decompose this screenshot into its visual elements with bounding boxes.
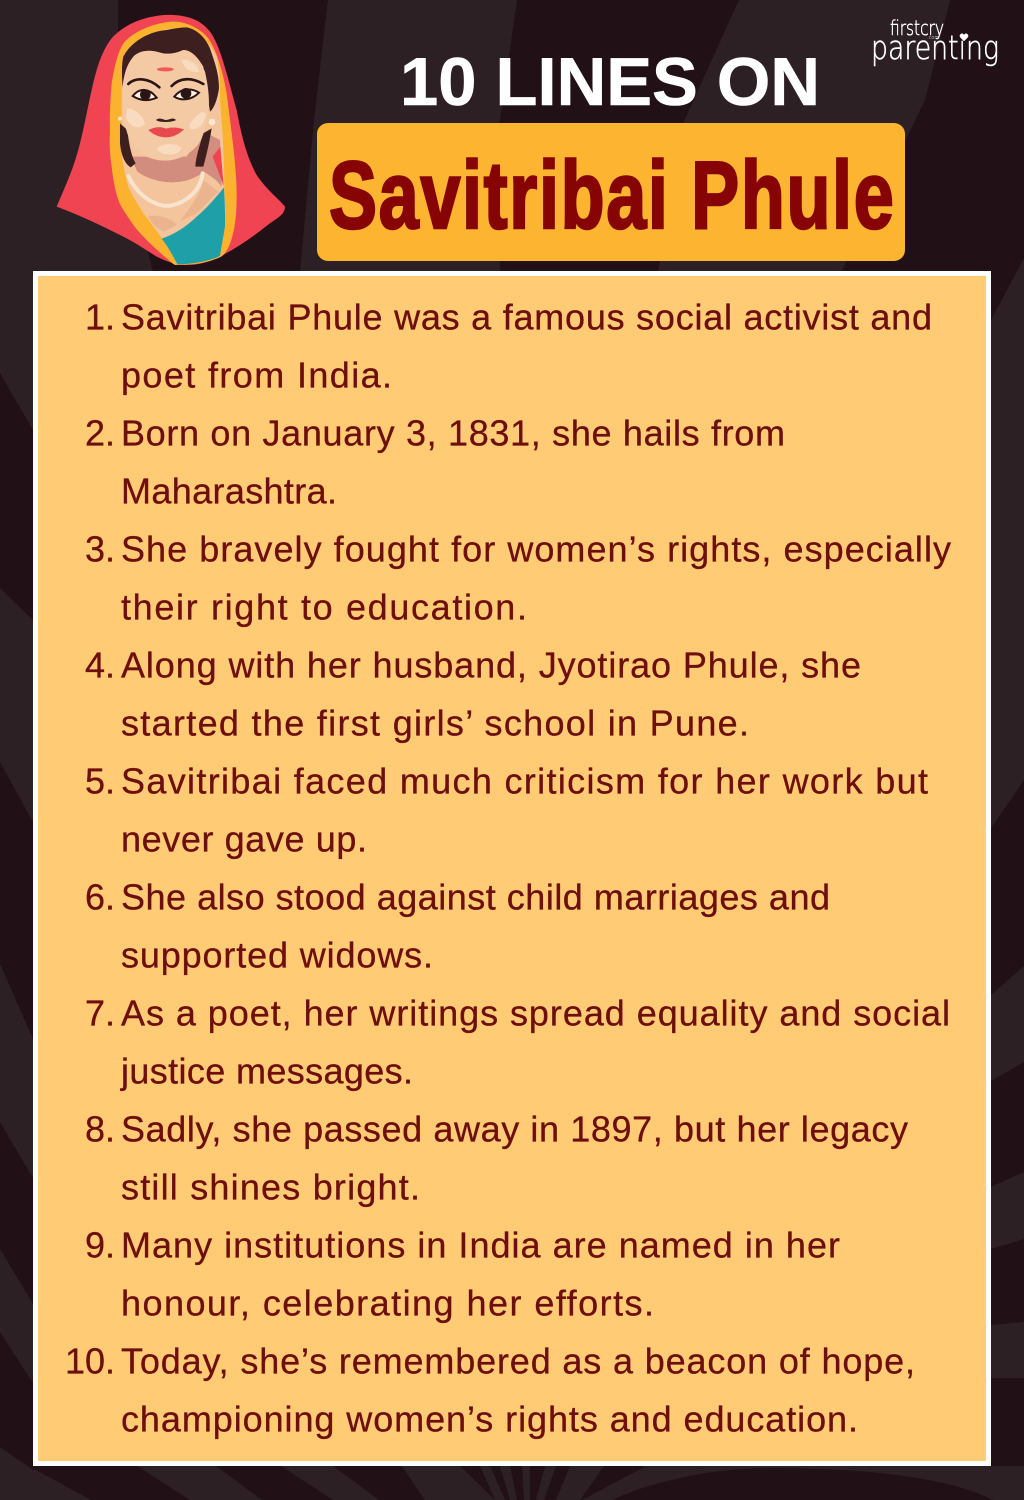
teal blouse — [162, 187, 225, 264]
logo domain: .com — [927, 35, 939, 41]
item 10: 10. — [65, 1340, 115, 1382]
item 9: 9. — [85, 1224, 115, 1266]
neck and chest — [122, 28, 225, 263]
eyebrows — [128, 79, 203, 87]
item 1: 1. — [85, 296, 115, 338]
item 1 — [85, 296, 932, 396]
item 3: their right to education. — [121, 586, 527, 628]
item 8: still shines bright. — [121, 1166, 420, 1208]
item 7: As a poet, her writings spread equality and social — [121, 992, 950, 1034]
logo: FirstCry Parenting — [871, 16, 999, 67]
item 5 — [85, 760, 928, 860]
bindi — [157, 67, 174, 71]
item 2 — [85, 412, 785, 512]
item 10: championing women’s rights and education. — [121, 1398, 858, 1440]
item 7: justice messages. — [120, 1050, 413, 1092]
name banner — [317, 123, 905, 261]
eyes — [133, 89, 199, 100]
item 1: poet from India. — [121, 354, 392, 396]
chest highlight — [148, 216, 177, 232]
pearl necklace — [128, 173, 203, 206]
item 4: Along with her husband, Jyotirao Phule, she — [121, 644, 861, 686]
chest shadow — [180, 180, 218, 222]
item 8 — [85, 1108, 908, 1208]
item 7 — [85, 992, 950, 1092]
lower hair right — [195, 128, 212, 167]
item 3: 3. — [85, 528, 115, 570]
illustration: Savitribai Phule portrait — [57, 15, 285, 265]
item 2: Born on January 3, 1831, she hails from — [121, 412, 785, 454]
neck shadow — [131, 132, 222, 187]
item 9: honour, celebrating her efforts. — [121, 1282, 654, 1324]
item 9 — [85, 1224, 840, 1324]
item 9: Many institutions in India are named in her — [121, 1224, 840, 1266]
item 7: 7. — [85, 992, 115, 1034]
item 10 — [65, 1340, 915, 1440]
item 8: Sadly, she passed away in 1897, but her legacy — [121, 1108, 908, 1150]
item 10: Today, she’s remembered as a beacon of hope, — [121, 1340, 915, 1382]
panel: ten lines list — [36, 274, 988, 1464]
hair — [122, 27, 219, 112]
item 6: She also stood against child marriages and — [121, 876, 830, 918]
item 5: Savitribai faced much criticism for her work but — [121, 760, 928, 802]
item 2: 2. — [85, 412, 115, 454]
logo word firstcry: firstcry — [890, 16, 944, 40]
face — [123, 50, 209, 161]
item 4: 4. — [85, 644, 115, 686]
nose — [156, 119, 176, 122]
face highlights — [126, 60, 206, 155]
lips — [148, 127, 184, 137]
item 6 — [85, 876, 830, 976]
item 2: Maharashtra. — [121, 470, 337, 512]
lower hair left — [120, 123, 136, 167]
item 3: She bravely fought for women’s rights, especially — [121, 528, 951, 570]
item 8: 8. — [85, 1108, 115, 1150]
logo heart — [960, 34, 968, 41]
item 1: Savitribai Phule was a famous social activist and — [121, 296, 932, 338]
title: 10 LINES ON: 10 LINES ON — [400, 44, 820, 120]
item 6: 6. — [85, 876, 115, 918]
ears with pearl earrings — [209, 119, 215, 125]
red veil inner wedge — [213, 147, 224, 186]
name heading: Savitribai Phule — [329, 141, 894, 248]
yellow saree border — [110, 22, 237, 265]
item 6: supported widows. — [121, 934, 433, 976]
red saree veil — [57, 15, 285, 265]
item 4 — [85, 644, 861, 744]
item 4: started the first girls’ school in Pune. — [121, 702, 749, 744]
item 5: never gave up. — [121, 818, 367, 860]
item 3 — [85, 528, 951, 628]
item 5: 5. — [85, 760, 115, 802]
